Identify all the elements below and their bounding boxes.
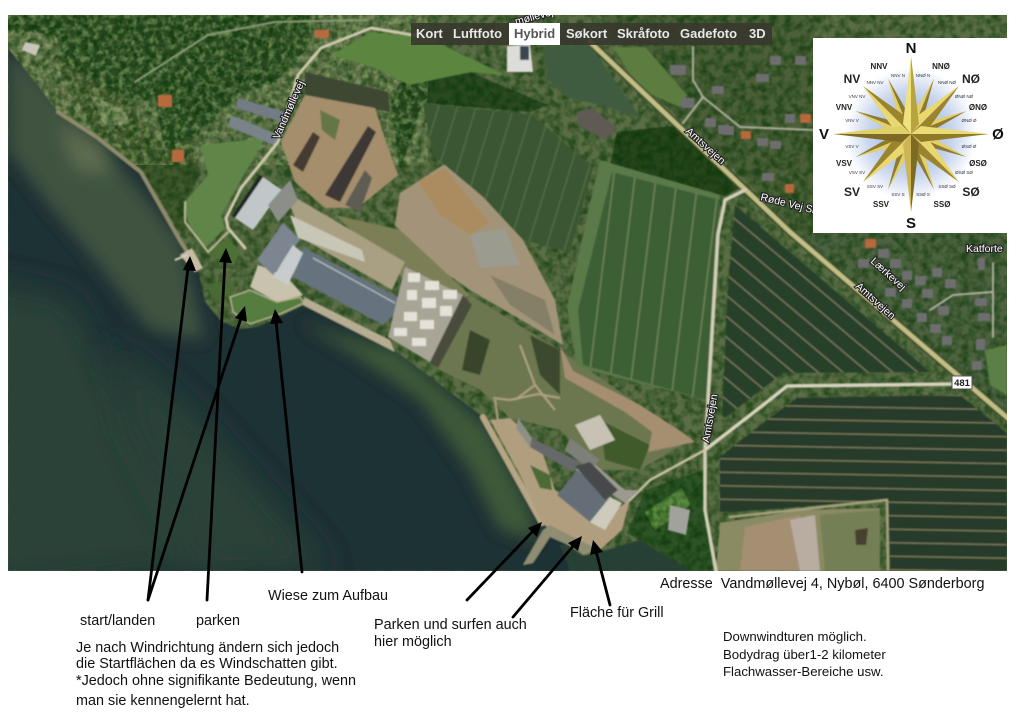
compass main labels: S: [906, 215, 916, 232]
compass minor labels: NNØ N: [916, 73, 930, 78]
central quarry: [395, 165, 563, 345]
compass tertiary labels: NNØ: [932, 62, 950, 71]
compass secondary labels: NV: [844, 72, 860, 86]
compass secondary labels: NØ: [962, 72, 980, 86]
compass tertiary labels: VNV: [836, 103, 853, 112]
village base: [600, 15, 815, 232]
note: downwind: Downwindturen möglich.: [723, 629, 867, 644]
compass main labels: V: [819, 126, 829, 143]
west houses: [158, 30, 329, 162]
map type toolbar: 3D: [749, 26, 766, 41]
label: parken: parken: [196, 613, 240, 629]
note: wind direction: *Jedoch ohne signifikante Bedeutung, wenn: [76, 673, 356, 689]
arrow: start/landen to shore: [148, 256, 196, 600]
forest: [8, 15, 310, 148]
land highlights: [8, 15, 428, 165]
north quarry: [281, 95, 398, 208]
farmhouse: [577, 108, 617, 140]
road sign 481: [952, 376, 972, 389]
compass main labels: [819, 40, 1004, 232]
village houses: [670, 56, 990, 370]
house in forest corner: [668, 505, 690, 535]
arrow: Parken und surfen second: [513, 536, 582, 617]
compass minor labels: VSV V: [845, 144, 859, 149]
compass minor labels: [845, 73, 977, 197]
olive ground south of quarry: [436, 295, 690, 470]
grill meadow: [250, 265, 303, 302]
water: [8, 48, 689, 571]
map type toolbar: Hybrid: [514, 26, 555, 41]
map type toolbar: Skråfoto: [617, 26, 670, 41]
map labels: Vandmøllevej: [271, 79, 307, 141]
label: start/landen: start/landen: [80, 613, 155, 629]
label: Parken und surfen: [374, 617, 527, 650]
compass minor labels: ØNØ NØ: [955, 94, 974, 99]
compass tertiary labels: SSØ: [934, 200, 950, 209]
compass minor labels: VSV SV: [849, 170, 865, 175]
label: Parken und surfen: Parken und surfen auch: [374, 617, 527, 633]
map labels: Katforte: [966, 243, 1003, 255]
note: wind direction: [76, 640, 356, 709]
compass minor labels: NNØ NØ: [938, 80, 956, 85]
note: downwind: Flachwasser-Bereiche usw.: [723, 664, 884, 679]
label: Parken und surfen: hier möglich: [374, 634, 452, 650]
fields: [423, 103, 593, 252]
note: wind direction: Je nach Windrichtung ändern sich jedoch: [76, 640, 339, 656]
compass main labels: N: [906, 40, 916, 57]
compass secondary labels: SØ: [962, 185, 980, 199]
note: wind direction: die Startflächen da es Windschatten gibt.: [76, 656, 338, 672]
arrow: Wiese zum Aufbau: [270, 309, 302, 572]
aerial photo map: [0, 15, 1010, 590]
map labels: møllevej: [514, 6, 555, 28]
sandy track: [560, 345, 695, 452]
compass minor labels: ØNØ Ø: [961, 118, 977, 123]
lawn: [185, 138, 265, 248]
map labels: Amtsvejen: [700, 393, 720, 444]
strip between quarry and north factory: [336, 215, 470, 298]
map labels: Amtsvejen: [853, 280, 898, 322]
address: Adresse Vandmøllevej 4, Nybøl, 6400 Sønderborg: [660, 576, 984, 592]
compass tertiary labels: [836, 62, 987, 209]
map type toolbar: Kort: [416, 26, 443, 41]
label: Fläche für Grill: Fläche für Grill: [570, 605, 664, 621]
road sign 481: 481: [954, 378, 971, 389]
sandy ground factory north: [290, 198, 406, 290]
arrow: parken: [207, 248, 232, 600]
coastal vegetation: [50, 50, 200, 240]
farm at top: [507, 44, 533, 72]
note: downwind: Bodydrag über1-2 kilometer: [723, 647, 886, 662]
map type toolbar: Gadefoto: [680, 26, 737, 41]
compass minor labels: SSV SV: [867, 184, 883, 189]
top meadow: [331, 32, 505, 85]
compass secondary labels: [844, 72, 980, 199]
compass minor labels: VNV V: [845, 118, 859, 123]
map type toolbar: Søkort: [566, 26, 608, 41]
note: wind direction: man sie kennengelernt hat.: [76, 693, 250, 709]
arrow: Fläche für Grill: [590, 540, 610, 605]
arrow: Parken und surfen: [467, 522, 542, 600]
map labels: Røde Vej Sr: [759, 191, 818, 217]
map labels: Amtsvejen: [683, 125, 728, 167]
factory north: [235, 177, 282, 230]
southeast quarry: [716, 508, 880, 571]
compass minor labels: SSV S: [891, 192, 905, 197]
compass minor labels: NNV NV: [866, 80, 884, 85]
factory south: [516, 418, 532, 447]
arrows: [148, 248, 610, 617]
note: downwind: [723, 629, 886, 679]
roads: [58, 20, 1010, 571]
storage yard: [388, 267, 463, 362]
compass minor labels: NNV N: [891, 73, 905, 78]
label: Wiese zum Aufbau: Wiese zum Aufbau: [268, 588, 388, 604]
map type toolbar: [411, 23, 772, 45]
tree belts: [391, 72, 548, 170]
compass minor labels: ØSØ Ø: [962, 144, 977, 149]
jetty start area: [180, 248, 203, 272]
compass tertiary labels: SSV: [873, 200, 890, 209]
compass minor labels: VNV NV: [849, 94, 865, 99]
land texture: [8, 15, 1007, 571]
compass rose: [813, 38, 1007, 233]
map labels: Lærkevej: [868, 255, 908, 293]
compass main labels: Ø: [992, 126, 1004, 143]
factory south ground: [490, 418, 630, 550]
map labels: [271, 6, 1003, 444]
compass tertiary labels: ØSØ: [969, 159, 987, 168]
compass tertiary labels: ØNØ: [969, 103, 987, 112]
compass secondary labels: SV: [844, 185, 860, 199]
compass minor labels: ØSØ SØ: [955, 170, 973, 175]
compass minor labels: SSØ S: [916, 192, 930, 197]
map type toolbar: Luftfoto: [453, 26, 502, 41]
compass star: [833, 56, 989, 212]
compass tertiary labels: NNV: [871, 62, 888, 71]
arrow: start/landen to meadow: [148, 306, 247, 600]
compass tertiary labels: VSV: [836, 159, 853, 168]
compass minor labels: SSØ SØ: [938, 184, 956, 189]
long buildings: [236, 98, 285, 122]
